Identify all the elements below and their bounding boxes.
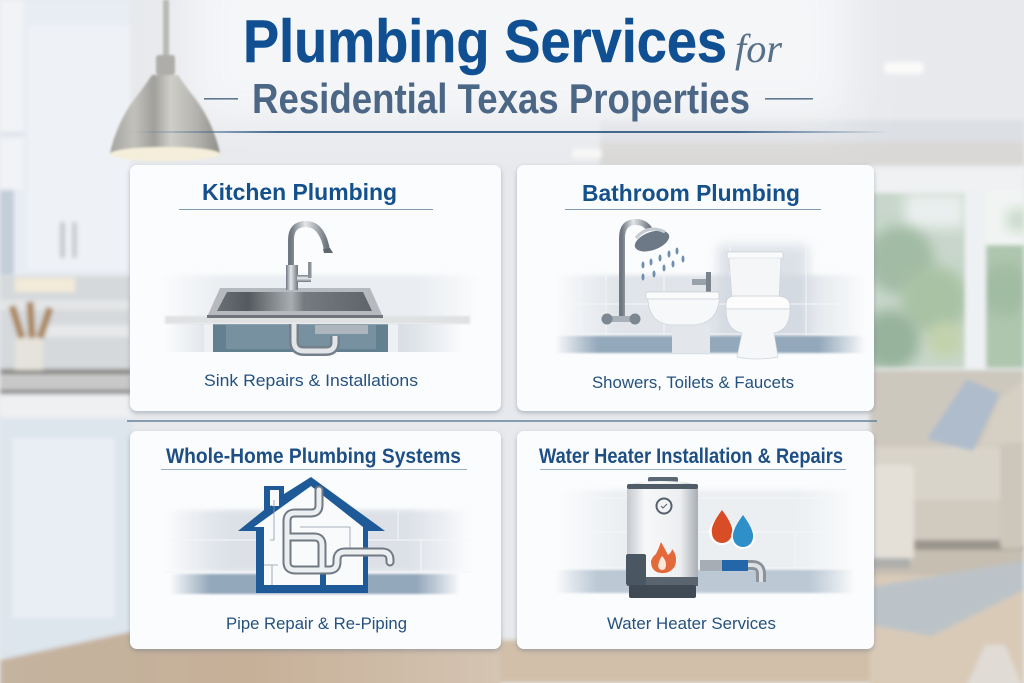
drain pipe bbox=[294, 324, 368, 351]
caption: pipe repair: Pipe Repair & Re-Piping bbox=[226, 614, 407, 633]
ceiling and window wall bbox=[600, 120, 1024, 142]
title word: for: for bbox=[735, 26, 782, 71]
sofa, pillows and rug bbox=[870, 370, 1024, 580]
water drops bbox=[642, 248, 684, 280]
caption: showers: Showers, Toilets & Faucets bbox=[592, 373, 794, 392]
control box bbox=[626, 554, 646, 585]
caption: sink repairs: Sink Repairs & Installations bbox=[204, 371, 418, 390]
illustration: shower, basin, toilet bbox=[555, 222, 865, 359]
basin bbox=[706, 272, 711, 292]
kitchen cabinets and counter bbox=[0, 0, 132, 658]
faucet bbox=[286, 224, 333, 290]
toilet bbox=[727, 252, 783, 259]
panel: kitchen plumbing bbox=[130, 165, 501, 411]
caption: water heater services: Water Heater Services bbox=[607, 614, 776, 633]
hot and cold drops bbox=[709, 519, 735, 545]
house outline bbox=[238, 477, 385, 593]
title bbox=[130, 8, 890, 133]
panel: whole-home plumbing systems bbox=[130, 431, 501, 649]
pipes bbox=[287, 490, 390, 570]
pendant lamp bbox=[110, 0, 220, 161]
panel: bathroom plumbing bbox=[517, 165, 874, 411]
sink basin bbox=[207, 288, 383, 317]
gauge bbox=[656, 498, 672, 514]
window trees bbox=[874, 192, 968, 370]
tank bbox=[648, 477, 678, 483]
shower bbox=[602, 222, 672, 324]
heading: whole-home: Whole-Home Plumbing Systems bbox=[166, 445, 461, 468]
illustration: kitchen sink bbox=[160, 224, 480, 352]
title line two: Residential Texas Properties bbox=[252, 75, 750, 122]
panel: water heater bbox=[517, 431, 874, 649]
floor and rug bbox=[500, 640, 874, 683]
heading: water heater: Water Heater Installation & Repairs bbox=[539, 445, 843, 468]
lights bbox=[884, 62, 924, 74]
water pipe bbox=[700, 560, 748, 571]
soft haze behind title bbox=[190, 0, 850, 120]
illustration: water heater bbox=[555, 477, 855, 598]
title line one: Plumbing Services bbox=[243, 8, 727, 75]
flame bbox=[651, 542, 676, 573]
illustration: house with pipes bbox=[165, 477, 470, 594]
heading: kitchen plumbing: Kitchen Plumbing bbox=[202, 179, 397, 205]
heading: bathroom plumbing: Bathroom Plumbing bbox=[582, 180, 800, 206]
